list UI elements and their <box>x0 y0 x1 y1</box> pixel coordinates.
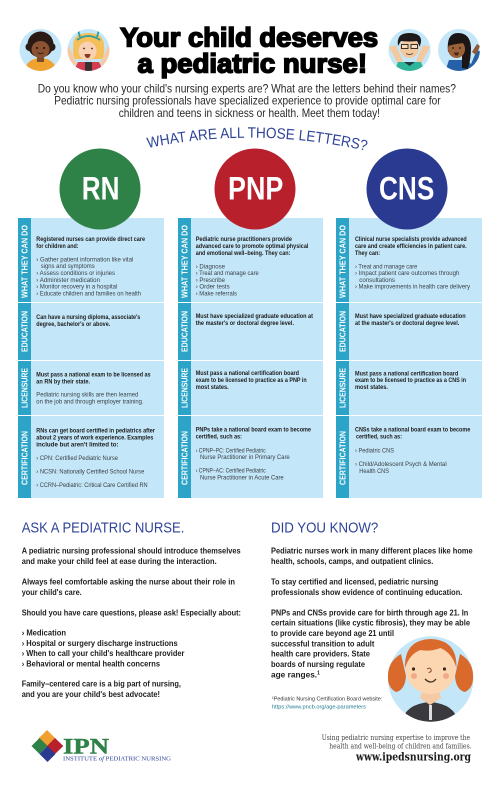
PNP licensure: Must pass a national certification board <box>196 370 299 377</box>
RN licensure: Must pass a national exam to be licensed as <box>36 371 151 378</box>
PNP row labels <box>180 225 190 485</box>
CNS badge: CNS <box>379 170 434 206</box>
curved heading: what are all those letters: WHAT ARE ALL THOSE LETTERS? <box>146 127 368 150</box>
CNS badge <box>366 148 448 230</box>
CNS what they can do <box>355 236 471 291</box>
logo wordmark: IPN <box>63 733 109 758</box>
CNS what they can do: › Make improvements in health care delivery <box>355 284 471 291</box>
tagline and website <box>322 733 472 763</box>
PNP education: Must have specialized graduate education at <box>196 313 314 320</box>
PNP certification <box>196 426 311 482</box>
did you know body text: To stay certified and licensed, pediatric nursing <box>271 577 438 587</box>
RN row labels <box>20 225 30 485</box>
did you know body text: age ranges. <box>271 669 317 679</box>
CNS education: at the master's or doctoral degree level. <box>355 320 459 327</box>
RN licensure: on the job and through employer training. <box>36 399 144 406</box>
RN licensure: Pediatric nursing skills are then learned <box>36 392 139 399</box>
CNS what they can do: › Treat and manage care <box>355 263 418 270</box>
PNP what they can do: › Diagnose <box>196 263 225 270</box>
RN what they can do: › Assess conditions or injuries <box>36 270 116 277</box>
footnote: ¹Pediatric Nursing Certification Board website: <box>272 697 382 703</box>
PNP what they can do: Pediatric nurse practitioners provide <box>196 236 292 243</box>
PNP certification: Nurse Practitioner in Primary Care <box>200 454 290 461</box>
CNS licensure: most states. <box>355 384 388 391</box>
intro text: Do you know who your child's nursing experts are? What are the letters behind their names? <box>38 82 456 95</box>
RN row labels: EDUCATION <box>20 311 30 352</box>
logo: Institute of Pediatric Nursing <box>32 730 171 763</box>
CNS what they can do: consultations <box>359 277 396 284</box>
PNP what they can do: › Order tests <box>196 284 230 291</box>
PNP badge <box>214 148 296 230</box>
did you know body text: successful transition to adult <box>271 638 375 648</box>
CNS certification: certified, such as: <box>356 434 402 441</box>
CNS row labels: WHAT THEY CAN DO <box>338 225 348 298</box>
PNP what they can do: and emotional well–being. They can: <box>196 250 290 257</box>
ask body text <box>22 546 241 699</box>
PNP certification: Nurse Practitioner in Acute Care <box>200 475 284 482</box>
did you know body text: health care providers. State <box>271 649 370 659</box>
RN licensure <box>36 371 151 406</box>
icon: child with blonde hair and headband <box>68 29 110 71</box>
PNP licensure <box>196 370 307 391</box>
PNP licensure: exam to be licensed to practice as a PNP in <box>196 377 307 384</box>
title: a pediatric nurse! <box>138 49 367 79</box>
PNP certification: › CPNP–PC: Certified Pediatric <box>196 447 266 454</box>
RN row labels: LICENSURE <box>20 368 30 408</box>
PNP row labels: WHAT THEY CAN DO <box>180 225 190 298</box>
PNP licensure: most states. <box>196 384 229 391</box>
ask body text: › When to call your child's healthcare provider <box>22 648 185 658</box>
ask body text: Should you have care questions, please ask! Especially about: <box>22 607 241 617</box>
logo wordmark <box>63 733 171 763</box>
PNP panel backgrounds <box>178 218 323 498</box>
RN certification: include but aren't limited to: <box>36 442 119 449</box>
RN what they can do: › Gather patient information like vital <box>36 256 134 263</box>
RN licensure: an RN by their state. <box>36 378 90 385</box>
RN education: degree, bachelor's or above. <box>36 321 110 328</box>
RN education <box>36 314 141 328</box>
PNP row labels: EDUCATION <box>180 311 190 352</box>
intro text: Pediatric nursing professionals have specialized experience to provide optimal care for <box>54 95 441 108</box>
RN certification: RNs can get board certified in pediatrics after <box>36 428 155 435</box>
heading: ask a pediatric nurse: ASK A PEDIATRIC NURSE. <box>22 520 184 537</box>
RN what they can do: Registered nurses can provide direct care <box>36 236 145 243</box>
CNS certification: › Pediatric CNS <box>355 447 395 454</box>
CNS row labels <box>338 225 348 485</box>
ask body text: Always feel comfortable asking the nurse about their role in <box>22 577 235 587</box>
tagline and website: Using pediatric nursing expertise to improve the <box>322 733 470 742</box>
CNS certification <box>355 427 471 475</box>
logo puzzle mark <box>32 730 63 762</box>
RN row labels: CERTIFICATION <box>20 431 30 485</box>
did you know body text: boards of nursing regulate <box>271 659 365 669</box>
did you know body text: professionals show evidence of continuing education. <box>271 587 462 597</box>
icon: child with curly dark hair <box>20 29 62 71</box>
tagline and website: www.ipedsnursing.org <box>355 750 471 763</box>
PNP row labels: LICENSURE <box>180 368 190 408</box>
CNS row labels: CERTIFICATION <box>338 431 348 485</box>
PNP what they can do: advanced care to promote optimal physical <box>196 243 309 250</box>
section: ask a pediatric nurse <box>22 520 241 699</box>
PNP certification: PNPs take a national board exam to become <box>196 426 311 434</box>
RN badge <box>60 148 140 230</box>
panel: CNS <box>336 148 482 498</box>
RN certification: › CPN: Certified Pediatric Nurse <box>36 455 118 462</box>
CNS certification: › Child/Adolescent Psych & Mental <box>355 461 447 468</box>
PNP education: the master's or doctoral degree level. <box>196 320 294 327</box>
CNS row labels: LICENSURE <box>338 368 348 408</box>
RN certification <box>36 428 155 489</box>
CNS licensure: Must pass a national certification board <box>355 370 458 377</box>
footnote <box>272 697 382 710</box>
ask body text: and make your child feel at ease during the interaction. <box>22 556 217 566</box>
section: did you know <box>271 520 473 710</box>
heading: did you know: DID YOU KNOW? <box>271 520 378 537</box>
CNS row labels: EDUCATION <box>338 311 348 352</box>
PNP badge: PNP <box>228 170 283 206</box>
RN what they can do <box>36 236 145 298</box>
logo wordmark: INSTITUTE of PEDIATRIC NURSING <box>63 756 171 763</box>
CNS certification: CNSs take a national board exam to become <box>355 427 471 434</box>
panel: RN <box>18 148 164 498</box>
intro text <box>38 82 456 120</box>
ask body text: Family–centered care is a big part of nursing, <box>22 679 181 689</box>
PNP what they can do <box>196 236 309 298</box>
PNP what they can do: › Make referrals <box>196 290 238 298</box>
title <box>120 23 378 79</box>
icon: girl with red pigtails <box>388 636 473 722</box>
RN what they can do: › Monitor recovery in a hospital <box>36 284 118 291</box>
ask body text: › Behavioral or mental health concerns <box>22 658 160 668</box>
did you know body text: PNPs and CNSs provide care for birth through age 21. In <box>271 607 468 617</box>
title: Your child deserves <box>120 23 378 53</box>
RN panel backgrounds <box>18 218 164 498</box>
intro text: children and teens in sickness or health. Meet them today! <box>119 107 380 120</box>
RN education: Can have a nursing diploma, associate's <box>36 314 141 321</box>
ask body text: and you are your child's best advocate! <box>22 689 160 699</box>
ask body text: your child's care. <box>22 587 82 597</box>
RN badge: RN <box>82 170 120 206</box>
did you know body text: 1 <box>317 670 320 676</box>
did you know body text: to provide care beyond age 21 until <box>271 628 394 638</box>
PNP certification: › CPNP–AC: Certified Pediatric <box>196 468 266 475</box>
CNS education <box>355 313 466 327</box>
tagline and website: health and well-being of children and families. <box>329 741 472 750</box>
CNS what they can do: Clinical nurse specialists provide advanced <box>355 236 467 243</box>
CNS certification: Health CNS <box>359 468 390 475</box>
did you know body text: health, schools, camps, and outpatient clinics. <box>271 556 433 566</box>
CNS education: Must have specialized graduate education <box>355 313 466 320</box>
CNS licensure <box>355 370 466 391</box>
panel: PNP <box>178 148 323 498</box>
PNP what they can do: › Prescribe <box>196 277 225 284</box>
PNP education <box>196 313 314 327</box>
ask body text: A pediatric nursing professional should introduce themselves <box>22 546 241 556</box>
RN row labels: WHAT THEY CAN DO <box>20 225 30 298</box>
CNS what they can do: › Impact patient care outcomes through <box>355 270 460 277</box>
RN certification: about 2 years of work experience. Examples <box>36 435 154 442</box>
CNS licensure: exam to be licensed to practice as a CNS in <box>355 377 466 384</box>
PNP what they can do: › Treat and manage care <box>196 270 259 277</box>
ask body text: › Hospital or surgery discharge instructions <box>22 638 178 648</box>
did you know body text <box>271 546 473 679</box>
CNS what they can do: They can: <box>355 250 380 257</box>
CNS panel backgrounds <box>336 218 482 498</box>
RN what they can do: for children and: <box>36 243 79 250</box>
CNS what they can do: care and create efficiencies in patient care. <box>355 243 467 250</box>
PNP certification: certified, such as: <box>196 433 242 440</box>
ask body text: › Medication <box>22 628 66 638</box>
RN certification: › NCSN: Nationally Certified School Nurse <box>36 469 145 476</box>
footnote: https://www.pncb.org/age-parameters <box>272 704 366 710</box>
icon: girl with long dark hair and blue shirt <box>438 29 481 72</box>
RN what they can do: › Administer medication <box>36 277 100 284</box>
PNP row labels: CERTIFICATION <box>180 431 190 485</box>
RN what they can do: › Educate children and families on health <box>36 290 141 298</box>
icon: boy with glasses and teal shirt <box>388 29 430 72</box>
RN certification: › CCRN–Pediatric: Critical Care Certified RN <box>36 482 148 489</box>
did you know body text: certain situations (like cystic fibrosis), they may be able <box>271 618 470 628</box>
did you know body text: Pediatric nurses work in many different places like home <box>271 546 473 556</box>
RN what they can do: signs and symptoms <box>41 263 95 270</box>
